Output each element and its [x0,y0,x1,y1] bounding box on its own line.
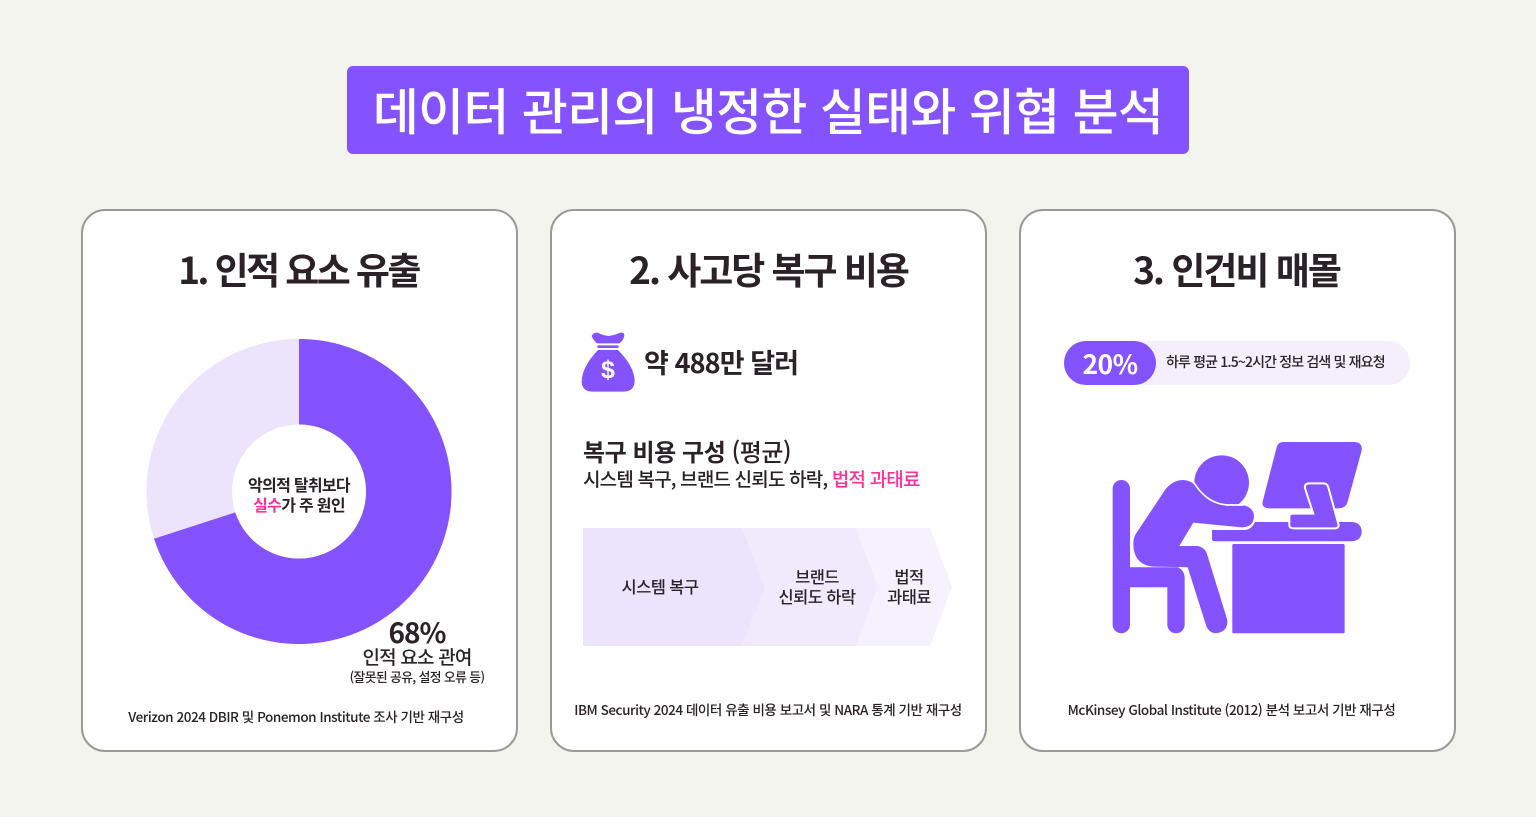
stat: 68%: 68% [388,612,446,652]
cost breakdown text: 시스템 복구, 브랜드 신뢰도 하락, 법적 과태료 [583,465,920,492]
chevron label: legal fines [887,564,931,608]
source: panel 2: IBM Security 2024 데이터 유출 비용 보고서 및 NARA 통계 기반 재구성 [574,699,962,719]
heading: panel 1: 1. 인적 요소 유출 [178,241,419,295]
donut center text: 악의적 탈취보다 [248,472,350,496]
chevron label: legal fines: 과태료 [887,584,931,608]
panel: cost per incident [550,209,987,752]
pill badge: 20%: 20% [1082,343,1138,382]
heading: panel 2: 2. 사고당 복구 비용 [629,241,908,295]
icon: dollar sign: $ [601,356,615,384]
title text: 데이터 관리의 냉정한 실태와 위협 분석 [373,73,1163,145]
chevron label: brand trust: 신뢰도 하락 [779,584,855,608]
donut center text: 실수가 주 원인 [253,492,345,516]
title banner [347,66,1189,154]
panel: wasted labor cost [1019,209,1456,752]
stat pill [1064,341,1410,385]
stat label: 인적 요소 관여 [362,643,472,670]
panel: human factor leak [81,209,518,752]
source: panel 3: McKinsey Global Institute (2012) 분석 보고서 기반 재구성 [1068,699,1395,719]
chevron label: brand trust: 브랜드 [795,564,839,588]
chevron label: system recovery: 시스템 복구 [622,574,698,598]
cost value: 약 488만 달러 [644,342,798,381]
donut center text [248,472,350,516]
pill badge: 20% [1064,341,1156,385]
chevron label: brand trust [779,564,856,608]
stat note: (잘못된 공유, 설정 오류 등) [350,667,484,686]
source: panel 1: Verizon 2024 DBIR 및 Ponemon Institute 조사 기반 재구성 [128,706,464,726]
cost breakdown heading: 복구 비용 구성 (평균) [583,433,791,468]
pill text: 하루 평균 1.5~2시간 정보 검색 및 재요청 [1166,352,1385,372]
heading: panel 3: 3. 인건비 매몰 [1133,241,1340,295]
chevron label: legal fines: 법적 [894,564,924,588]
